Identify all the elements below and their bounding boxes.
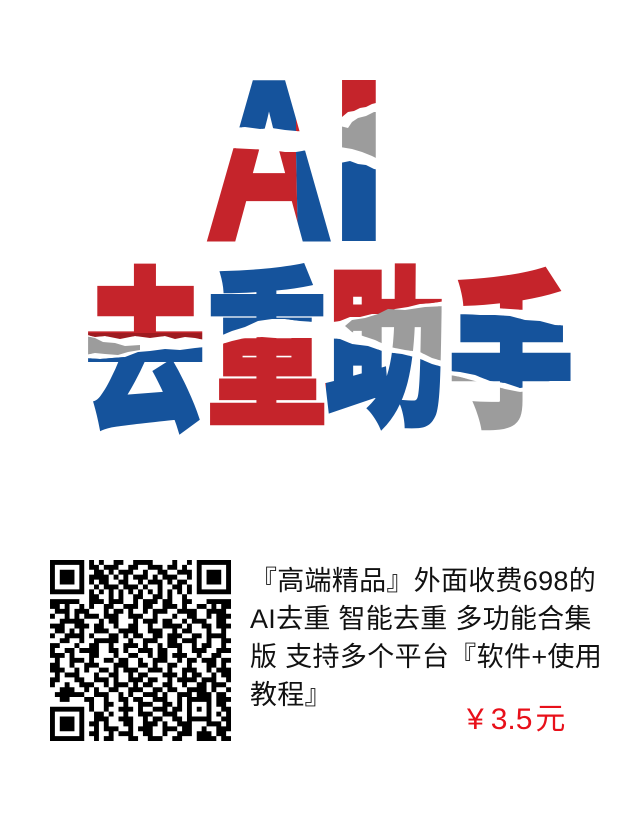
description line 3: 版 支持多个平台『软件+使用	[250, 642, 602, 672]
character 助: 助	[325, 214, 447, 460]
description text	[250, 566, 602, 710]
logo: AI 去重助手	[85, 29, 573, 466]
character 重: 重	[206, 212, 328, 462]
character 手: 手	[449, 219, 573, 460]
letter I: I	[326, 29, 391, 291]
description line 2: AI去重 智能去重 多功能合集	[250, 604, 592, 634]
QR code	[50, 562, 231, 739]
letter A: A	[204, 32, 334, 289]
description line 1: 『高端精品』外面收费698的	[250, 566, 596, 596]
description line 4: 教程』	[250, 680, 332, 710]
character 去: 去	[85, 214, 205, 466]
price: ¥3.5元	[467, 703, 565, 736]
